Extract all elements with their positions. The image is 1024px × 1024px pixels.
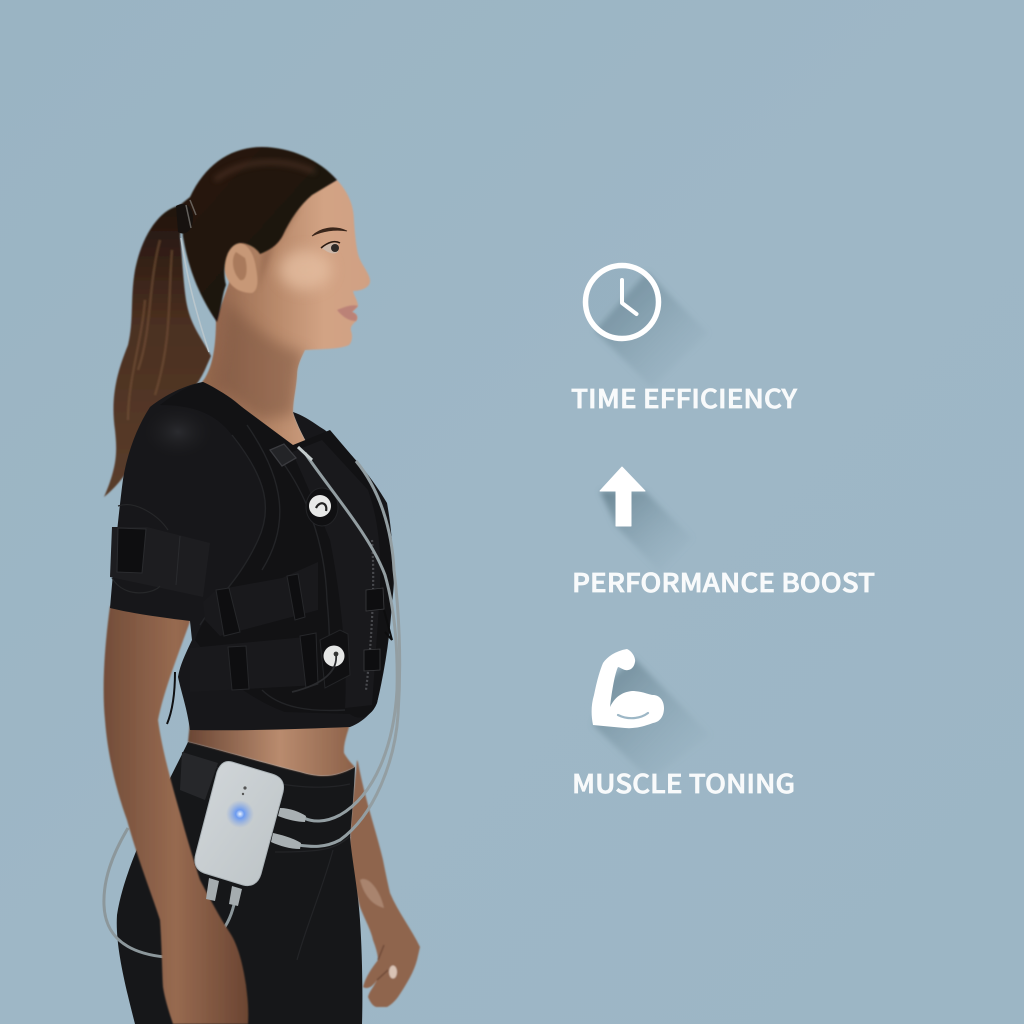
- flexed arm icon: [592, 649, 664, 728]
- blue indicator light: [226, 800, 254, 828]
- cable highlight over chest: [298, 447, 312, 460]
- face and neck: [200, 180, 370, 452]
- waist belt: [180, 752, 218, 800]
- sensor cables: [298, 453, 400, 846]
- label: PERFORMANCE BOOST: [572, 563, 875, 600]
- left cable loop: [104, 828, 165, 957]
- benefit: time efficiency: [571, 266, 798, 416]
- shirt body: [110, 382, 394, 730]
- hair: [180, 147, 337, 322]
- label: TIME EFFICIENCY: [571, 379, 798, 416]
- muscle long shadow: [593, 658, 710, 780]
- side strap lower: [190, 633, 318, 692]
- control unit: [195, 761, 284, 886]
- vest mesh front: [292, 440, 380, 708]
- benefit: muscle toning: [572, 649, 795, 801]
- lower plug cable: [221, 900, 235, 932]
- ear: [224, 242, 257, 293]
- eyebrow: [312, 228, 347, 236]
- electrode upper: [306, 488, 338, 526]
- side plugs: [271, 808, 306, 849]
- vest panel: [160, 382, 393, 718]
- midriff: [188, 716, 355, 776]
- eye: [322, 243, 338, 253]
- status dots: [243, 786, 247, 790]
- clock icon: [586, 266, 658, 338]
- zipper clips: [364, 588, 384, 671]
- vest seam lines: [200, 425, 345, 710]
- hair highlight: [215, 162, 315, 180]
- benefit: performance boost: [572, 467, 875, 600]
- black wire behind arm: [167, 672, 175, 724]
- zipper: [366, 540, 373, 690]
- lips: [337, 305, 358, 321]
- leggings: [117, 742, 362, 1024]
- figure: woman wearing EMS vest: [104, 147, 420, 1024]
- arrow icon: [600, 467, 645, 526]
- far arm and hand: [350, 760, 420, 1007]
- electrode lower: [292, 630, 350, 692]
- leggings seam: [190, 757, 350, 960]
- loose hair strand: [181, 238, 209, 352]
- neck shading: [215, 207, 331, 420]
- label: MUSCLE TONING: [572, 764, 795, 801]
- vest small wires: [378, 500, 392, 640]
- shoulder buckle: [270, 444, 296, 466]
- cheek highlight: [279, 250, 331, 290]
- arm strap: [110, 505, 210, 597]
- near arm: [104, 606, 248, 1024]
- clock long shadow: [595, 272, 708, 388]
- bottom plugs: [206, 878, 242, 906]
- arrow long shadow: [600, 491, 692, 572]
- shoulder sheen: [144, 406, 212, 458]
- ponytail: [104, 205, 211, 497]
- side strap upper: [203, 562, 318, 636]
- hair tie sheen: [186, 200, 196, 228]
- hair tie: [176, 204, 193, 234]
- temple shadow: [260, 212, 298, 277]
